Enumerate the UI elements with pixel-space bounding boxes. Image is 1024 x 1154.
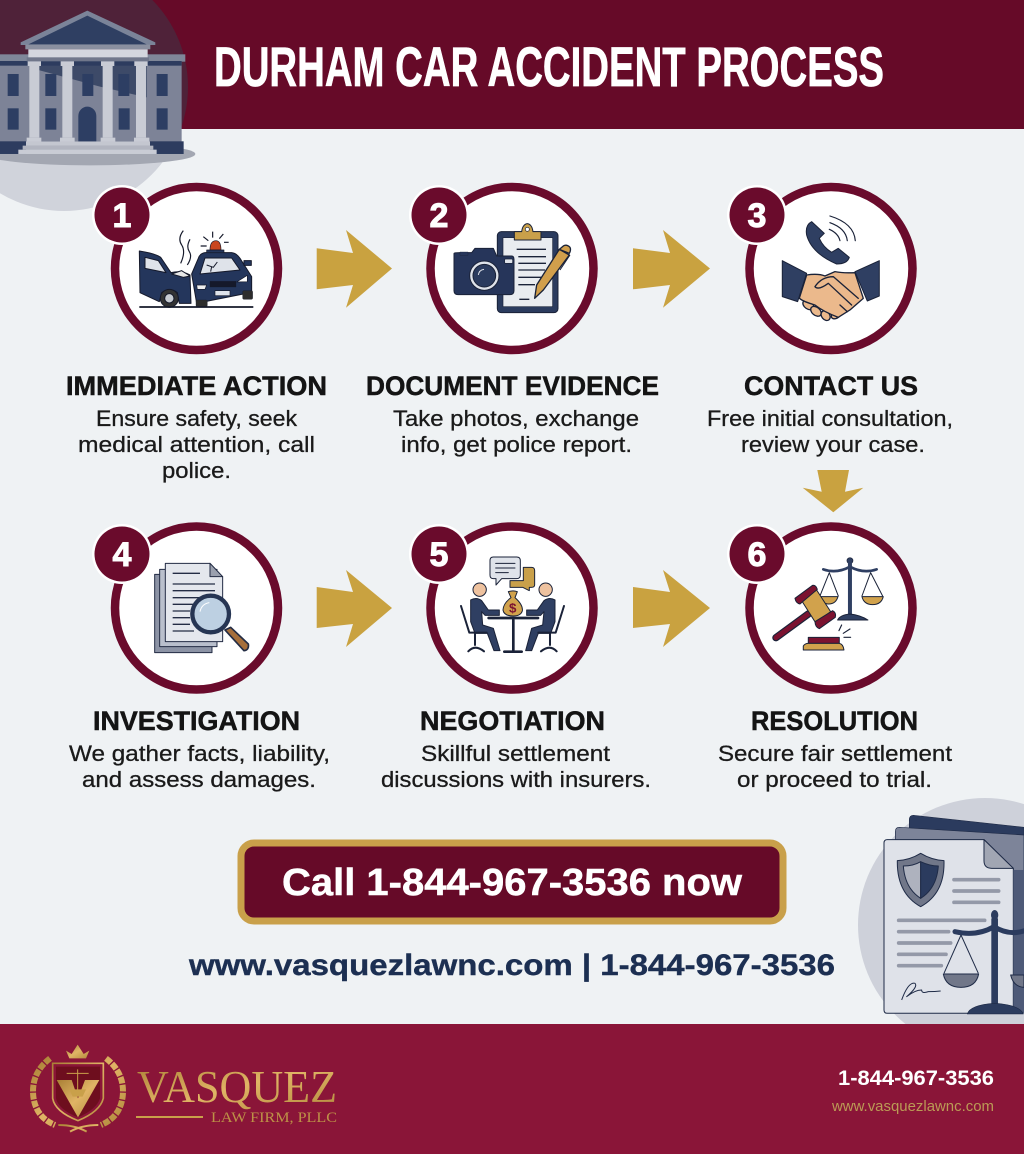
arrow 5 to 6 bbox=[633, 570, 710, 647]
header band bbox=[0, 0, 1024, 129]
call button bbox=[241, 843, 783, 921]
step 6 text bbox=[718, 706, 952, 792]
step 2 text: DOCUMENT EVIDENCE bbox=[366, 371, 659, 401]
step 6 text: Secure fair settlement bbox=[718, 741, 952, 766]
badge 2 bbox=[409, 185, 469, 245]
step 4 text: and assess damages. bbox=[82, 767, 316, 792]
step 3 bbox=[727, 185, 912, 350]
call button: Call 1-844-967-3536 now bbox=[282, 862, 742, 904]
ring 4 bbox=[115, 526, 278, 690]
logo crest bbox=[33, 1045, 123, 1132]
step 5 bbox=[409, 524, 594, 690]
arrow 4 to 5 bbox=[317, 570, 392, 647]
step 2 text bbox=[366, 371, 659, 457]
badge 6: 6 bbox=[748, 536, 766, 574]
badge 4: 4 bbox=[113, 536, 132, 574]
icon: car crash bbox=[139, 231, 253, 307]
arrow 3 to 6 bbox=[803, 470, 863, 512]
logo subtitle: LAW FIRM, PLLC bbox=[211, 1110, 337, 1126]
badge 6 bbox=[727, 524, 787, 584]
step 4 text: INVESTIGATION bbox=[93, 706, 300, 736]
ring 2 bbox=[430, 187, 594, 350]
step 6 bbox=[727, 524, 912, 690]
icon: documents and magnifier bbox=[155, 563, 248, 653]
step 5 text: NEGOTIATION bbox=[420, 706, 605, 736]
icon: legal document with scales bbox=[858, 798, 1024, 1024]
step 5 text: discussions with insurers. bbox=[381, 767, 651, 792]
step 3 text bbox=[707, 371, 953, 457]
icon: camera and clipboard bbox=[454, 224, 571, 313]
step 1 bbox=[92, 185, 278, 350]
step 1 text: medical attention, call bbox=[78, 432, 315, 457]
badge 5 bbox=[409, 524, 469, 584]
ring 1 bbox=[115, 187, 278, 350]
step 4 text: We gather facts, liability, bbox=[69, 741, 330, 766]
icon: courthouse bbox=[0, 11, 195, 165]
step 5 text bbox=[381, 706, 651, 792]
header circle backdrop bbox=[0, 0, 188, 211]
icon: negotiation table: $ bbox=[509, 600, 517, 615]
step 3 text: CONTACT US bbox=[744, 371, 918, 401]
step 1 text bbox=[66, 371, 327, 483]
footer band bbox=[0, 1024, 1024, 1154]
ring 6 bbox=[750, 526, 912, 690]
step 1 text: IMMEDIATE ACTION bbox=[66, 371, 327, 401]
logo rule bbox=[136, 1116, 203, 1118]
badge 2: 2 bbox=[430, 197, 448, 235]
badge 3: 3 bbox=[748, 197, 766, 235]
step 3 text: Free initial consultation, bbox=[707, 406, 953, 431]
logo wordmark: VASQUEZ bbox=[137, 1062, 337, 1112]
badge 1: 1 bbox=[113, 197, 131, 235]
ring 5 bbox=[430, 526, 594, 690]
step 6 text: RESOLUTION bbox=[751, 706, 918, 736]
logo: Vasquez Law Firm bbox=[33, 1045, 337, 1132]
website and phone line: www.vasquezlawnc.com | 1-844-967-3536 bbox=[188, 949, 835, 982]
arrow 1 to 2 bbox=[317, 230, 392, 308]
step 1 text: police. bbox=[162, 458, 231, 483]
icon: phone and handshake bbox=[782, 216, 879, 322]
ring 3 bbox=[750, 187, 912, 350]
step 2 bbox=[409, 185, 594, 350]
footer phone: 1-844-967-3536 bbox=[838, 1067, 994, 1090]
step 6 text: or proceed to trial. bbox=[737, 767, 932, 792]
icon: negotiation table bbox=[461, 557, 564, 652]
badge 3 bbox=[727, 185, 787, 245]
icon: gavel and scales bbox=[776, 558, 883, 650]
step 1 text: Ensure safety, seek bbox=[96, 406, 298, 431]
step 2 text: info, get police report. bbox=[401, 432, 632, 457]
step 2 text: Take photos, exchange bbox=[393, 406, 639, 431]
step 4 bbox=[92, 524, 278, 690]
step 5 text: Skillful settlement bbox=[421, 741, 610, 766]
step 3 text: review your case. bbox=[741, 432, 925, 457]
badge 1 bbox=[92, 185, 152, 245]
step 4 text bbox=[69, 706, 330, 792]
badge 4 bbox=[92, 524, 152, 584]
badge 5: 5 bbox=[430, 536, 448, 574]
arrow 2 to 3 bbox=[633, 230, 710, 308]
footer website: www.vasquezlawnc.com bbox=[831, 1099, 994, 1115]
